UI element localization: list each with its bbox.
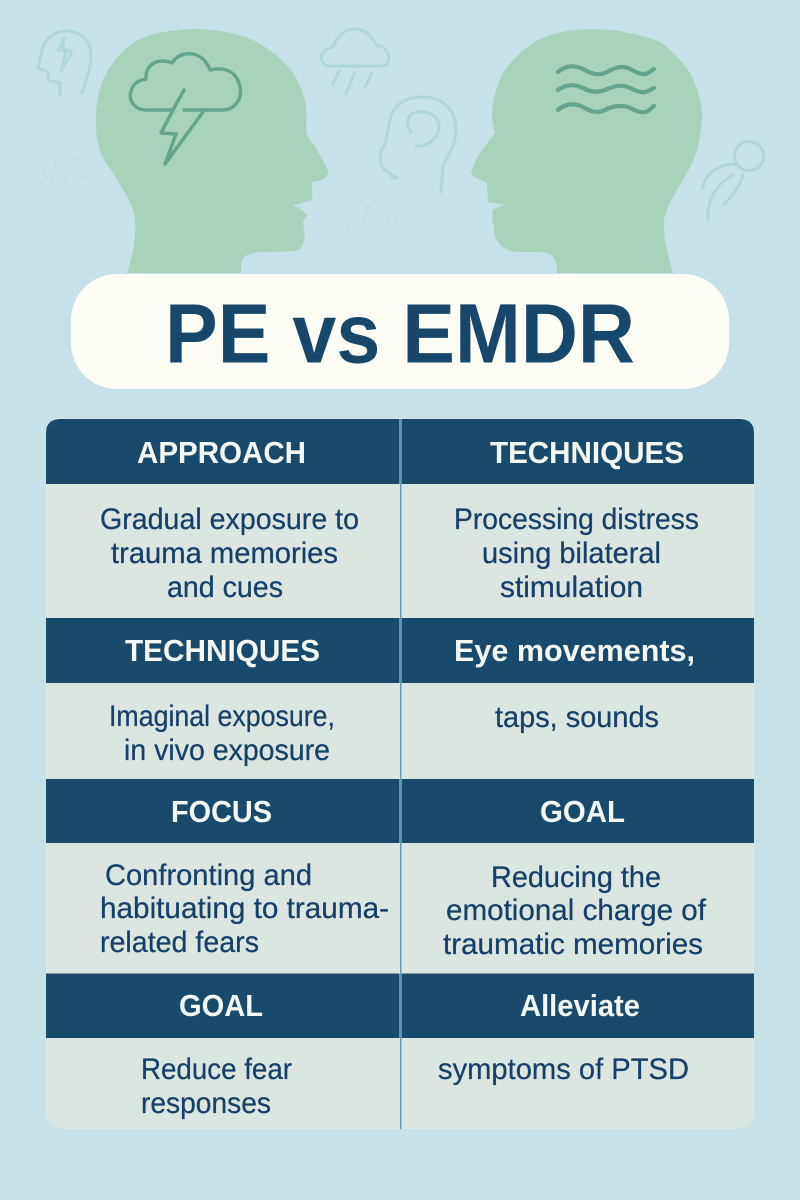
row 4 text: Reduce fear bbox=[141, 1053, 292, 1086]
header row 2: Eye movements, bbox=[454, 633, 695, 668]
header row 4: Alleviate bbox=[520, 988, 640, 1023]
head: right silhouette bbox=[471, 29, 702, 273]
header row 2 bbox=[46, 618, 754, 683]
row 3 text: Reducing the bbox=[491, 861, 661, 894]
row 3 text: related fears bbox=[100, 926, 259, 959]
title pill bbox=[71, 274, 729, 389]
title: PE vs EMDR bbox=[165, 286, 635, 380]
row 1 text: and cues bbox=[167, 571, 283, 604]
header row 1 bbox=[46, 419, 754, 484]
icon: head with spiral bbox=[380, 97, 456, 192]
row 1 text: using bilateral bbox=[482, 537, 661, 570]
background icons bbox=[38, 29, 764, 245]
header row 3: FOCUS bbox=[171, 794, 272, 829]
icon: rain cloud bbox=[321, 29, 389, 94]
row 2 text bbox=[109, 700, 659, 767]
icon: calm waves bbox=[558, 66, 654, 112]
comparison table bbox=[46, 418, 754, 1129]
header row 1: APPROACH bbox=[137, 435, 306, 470]
row 3 text: habituating to trauma- bbox=[100, 892, 389, 925]
header row 3: GOAL bbox=[540, 794, 625, 829]
icon: small head with lightning bbox=[38, 31, 91, 95]
faint background scribbles bbox=[42, 158, 402, 245]
row 3 text: traumatic memories bbox=[443, 928, 703, 961]
row 2 text: Imaginal exposure, bbox=[109, 700, 335, 733]
row 1 text: trauma memories bbox=[111, 537, 338, 570]
header row 2: TECHNIQUES bbox=[125, 633, 320, 668]
row 1 text: Processing distress bbox=[454, 503, 699, 536]
row 1 text: stimulation bbox=[500, 571, 643, 604]
row 4 text bbox=[141, 1053, 689, 1120]
row 3 text: Confronting and bbox=[105, 859, 312, 892]
head: left silhouette bbox=[96, 29, 328, 273]
row 3 text: emotional charge of bbox=[446, 894, 707, 927]
header row 4 bbox=[46, 974, 754, 1038]
row 2 text: taps, sounds bbox=[495, 701, 659, 734]
row 4 text: symptoms of PTSD bbox=[438, 1053, 689, 1086]
header row 1: TECHNIQUES bbox=[490, 435, 684, 470]
icon: storm cloud with lightning bbox=[130, 54, 240, 164]
row 2 text: in vivo exposure bbox=[124, 734, 330, 767]
row 1 text bbox=[100, 503, 699, 604]
table body background bbox=[46, 418, 754, 1129]
row 3 text bbox=[100, 859, 707, 961]
header row 3 bbox=[46, 779, 754, 843]
row 4 text: responses bbox=[141, 1087, 271, 1120]
header row 4: GOAL bbox=[179, 988, 263, 1023]
icon: figure with circle bbox=[703, 142, 764, 220]
column divider: cells bbox=[400, 419, 402, 1129]
row 1 text: Gradual exposure to bbox=[100, 503, 359, 536]
